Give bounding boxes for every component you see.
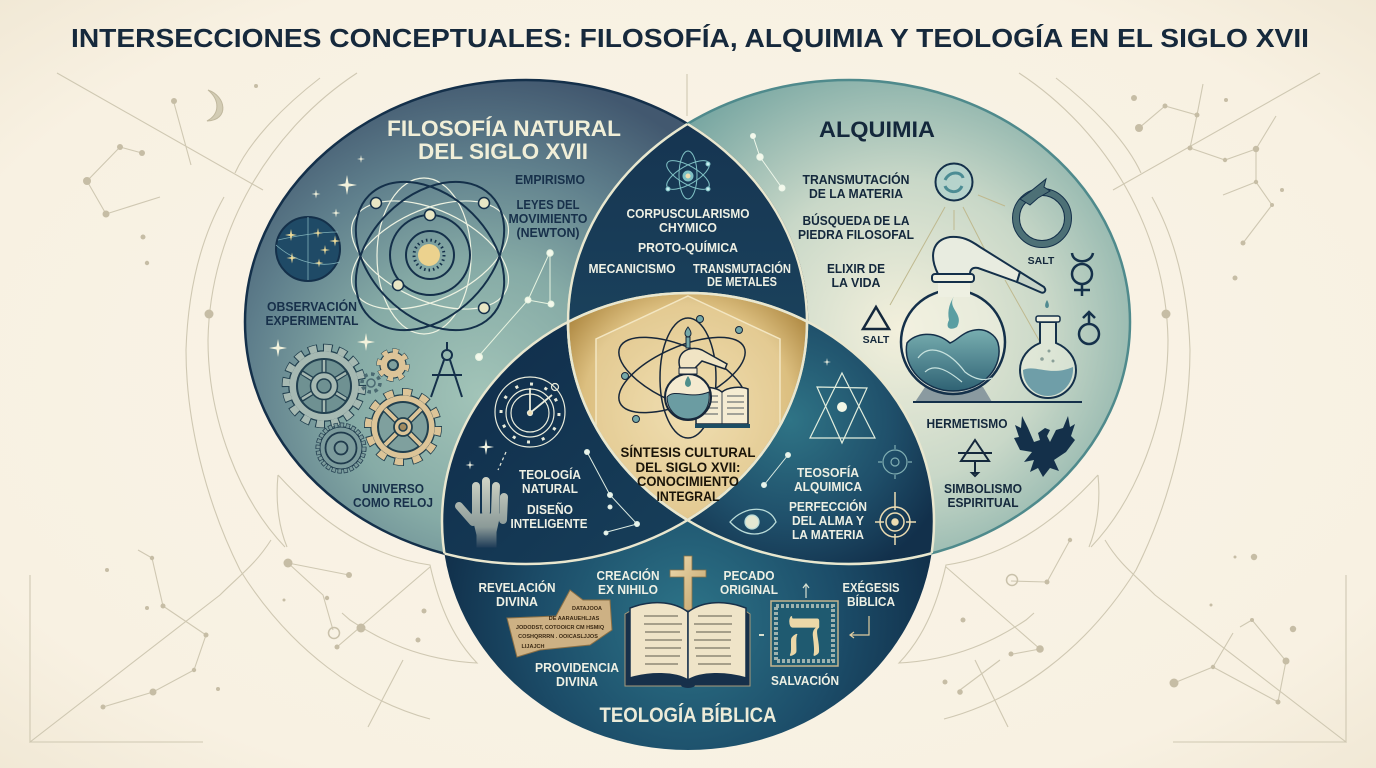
- label: síntesis cultural: DEL SIGLO XVII:: [636, 460, 740, 475]
- labels: MOVIMIENTO: [508, 212, 588, 226]
- icon: phoenix: [1014, 416, 1075, 477]
- labels: CREACIÓN: [596, 568, 660, 583]
- icon: atom solar system: [327, 153, 533, 359]
- labels: INTELIGENTE: [510, 517, 588, 531]
- icon: scroll: [507, 590, 612, 657]
- labels: LA MATERIA: [792, 528, 864, 542]
- icon: connector lines: [890, 195, 1040, 342]
- labels: [510, 467, 588, 531]
- labels: MECANICISMO: [588, 262, 676, 276]
- icon: alchemical triangle: [958, 440, 992, 476]
- labels: UNIVERSO: [362, 482, 424, 496]
- labels: [478, 568, 900, 689]
- labels: DISEÑO: [527, 502, 573, 517]
- icon: scroll: JODODST, COTOOICR CM HSMIQ: [516, 625, 605, 631]
- labels: HERMETISMO: [926, 417, 1008, 431]
- labels: TRANSMUTACIÓN: [693, 261, 791, 276]
- label: síntesis cultural: CONOCIMIENTO: [637, 474, 739, 489]
- labels: ORIGINAL: [720, 583, 778, 597]
- panel: alquimia y teología: [730, 358, 916, 545]
- labels: PERFECCIÓN: [789, 499, 867, 514]
- icon: scroll: DE AARAUEHLJAS: [549, 616, 600, 622]
- icon: compass: [431, 342, 462, 397]
- labels: CORPUSCULARISMO: [626, 207, 750, 221]
- labels: DIVINA: [556, 675, 598, 689]
- labels: DE METALES: [707, 275, 777, 289]
- labels: PIEDRA FILOSOFAL: [798, 228, 914, 242]
- icon: celestial globe: [276, 217, 340, 281]
- icon: sparkles: [466, 439, 494, 470]
- labels: [588, 207, 791, 289]
- labels: BÍBLICA: [847, 594, 895, 609]
- label: síntesis cultural: [620, 445, 756, 504]
- icon: eye: [730, 509, 776, 534]
- panel: filosofía natural: [266, 116, 621, 510]
- labels: PROVIDENCIA: [535, 661, 619, 675]
- icon: hexagram: [810, 358, 875, 443]
- icon: open bible: [625, 603, 750, 688]
- icon: hebrew letter: ה: [786, 597, 824, 670]
- icon: open hand: [459, 481, 504, 547]
- icon: hebrew letter: [771, 597, 838, 670]
- icon: alembic: [901, 237, 1082, 402]
- panel: filosofía y teología: [459, 377, 640, 547]
- labels: NATURAL: [522, 482, 578, 496]
- heading: filosofía natural: DEL SIGLO XVII: [418, 139, 588, 164]
- labels: BÚSQUEDA DE LA: [802, 213, 910, 228]
- icon: arrows: [759, 584, 869, 638]
- labels: [789, 465, 867, 542]
- icon: mercury symbol: [1072, 253, 1093, 296]
- icon: philosopher's stone orb: [936, 164, 972, 200]
- heading: filosofía natural: FILOSOFÍA NATURAL: [387, 116, 621, 141]
- labels: EX NIHILO: [598, 583, 658, 597]
- icon: gears: [286, 348, 438, 471]
- icon: constellation: [762, 452, 790, 488]
- icon: constellation: [476, 250, 554, 360]
- labels: SIMBOLISMO: [944, 482, 1022, 496]
- icon: target: [875, 492, 916, 545]
- icon: atom: [663, 151, 713, 199]
- panel: filosofía y alquimia: [588, 151, 791, 289]
- labels: SALVACIÓN: [771, 673, 839, 688]
- labels: ELIXIR DE: [827, 262, 885, 276]
- labels: LEYES DEL: [516, 198, 580, 212]
- heading: teología bíblica: TEOLOGÍA BÍBLICA: [600, 704, 776, 727]
- labels: TRANSMUTACIÓN: [802, 172, 910, 187]
- icon: star clock: [495, 377, 565, 470]
- icon: cross: [670, 556, 706, 612]
- panel: síntesis central: [608, 316, 756, 504]
- labels: TEOSOFÍA: [797, 465, 859, 480]
- labels: OBSERVACIÓN: [267, 299, 357, 314]
- icon: scroll: DATAJOOA: [572, 606, 602, 612]
- icon: mars symbol: [1079, 312, 1099, 344]
- icon: small flask: [1020, 300, 1076, 398]
- label: síntesis cultural: INTEGRAL: [656, 489, 720, 504]
- icon: scroll: LIJAJCH: [522, 644, 544, 650]
- labels: REVELACIÓN: [478, 580, 556, 595]
- labels: EMPIRISMO: [515, 173, 585, 187]
- labels: PECADO: [724, 569, 775, 583]
- icon: small constellation: [750, 134, 785, 191]
- labels: [798, 172, 1055, 510]
- icon: mandala: [878, 445, 912, 479]
- labels: LA VIDA: [832, 276, 880, 290]
- labels: COMO RELOJ: [353, 496, 433, 510]
- labels: (NEWTON): [516, 226, 580, 240]
- labels: [266, 173, 588, 510]
- venn diagram shapes: [245, 80, 1130, 750]
- labels: EXPERIMENTAL: [266, 314, 359, 328]
- heading: alquimia: ALQUIMIA: [819, 117, 935, 142]
- labels: SALT: [863, 334, 890, 346]
- icon: constellation: [584, 450, 640, 535]
- icon: scroll: COSHQRRRN . OOICASLJJOS: [518, 634, 598, 640]
- labels: ALQUIMICA: [794, 480, 862, 494]
- labels: DE LA MATERIA: [809, 187, 903, 201]
- labels: TEOLOGÍA: [519, 467, 581, 482]
- title: INTERSECCIONES CONCEPTUALES: FILOSOFÍA, ALQUIMIA Y TEOLOGÍA EN EL SIGLO XVII: [71, 23, 1309, 53]
- icon: earth triangle: [863, 307, 889, 329]
- labels: ESPIRITUAL: [948, 496, 1019, 510]
- labels: DIVINA: [496, 595, 538, 609]
- labels: EXÉGESIS: [842, 580, 900, 595]
- heading: filosofía natural: [387, 116, 621, 164]
- icon: atom, alembic and book: [608, 316, 756, 438]
- panel: alquimia: [750, 117, 1099, 510]
- label: síntesis cultural: SÍNTESIS CULTURAL: [620, 445, 756, 460]
- icon: sparkles: [269, 155, 375, 357]
- labels: CHYMICO: [659, 221, 717, 235]
- labels: DEL ALMA Y: [792, 514, 865, 528]
- icon: ouroboros: [1016, 179, 1068, 244]
- labels: PROTO-QUÍMICA: [638, 240, 738, 255]
- labels: SALT: [1028, 255, 1055, 267]
- panel: teología bíblica: [478, 556, 900, 727]
